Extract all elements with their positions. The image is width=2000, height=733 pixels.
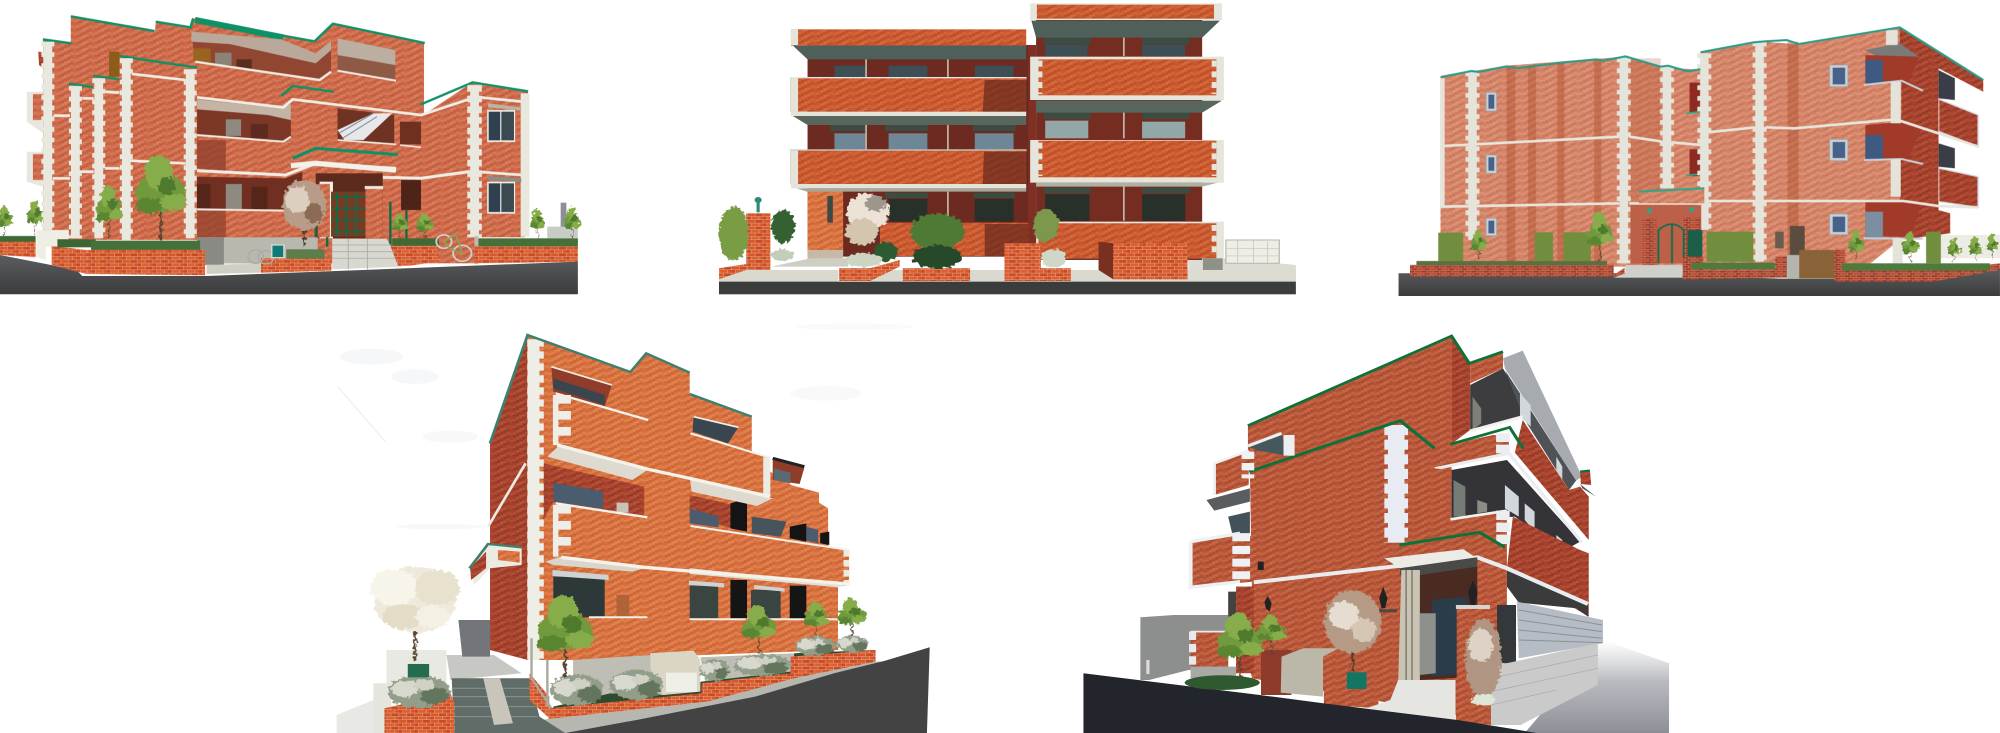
upper-right roof and soffit	[1470, 351, 1596, 540]
shrubs	[387, 635, 869, 708]
planters and pillars	[719, 197, 1188, 281]
small side balcony	[469, 544, 522, 585]
planting beds and hedges	[0, 230, 578, 275]
louvre fence and block wall	[1491, 602, 1603, 725]
mid balcony front	[1434, 433, 1582, 543]
concrete base and steps	[197, 236, 478, 274]
planters	[1410, 250, 2000, 282]
side wall	[490, 338, 528, 660]
left balconies	[1191, 433, 1295, 673]
trees	[1471, 212, 1919, 263]
balcony quoins	[556, 395, 562, 557]
side block	[1191, 632, 1236, 678]
green copings	[1441, 27, 1983, 80]
green copings	[1248, 336, 1590, 547]
quoin column	[1375, 425, 1417, 543]
ground planting band	[553, 650, 874, 710]
lower balconies	[545, 503, 849, 585]
middle recesses	[543, 463, 829, 545]
left wing balconies	[790, 29, 1028, 256]
railing and storage box	[532, 638, 700, 708]
hedge	[1185, 675, 1260, 690]
entrance canopy	[1384, 549, 1477, 682]
name sign	[408, 664, 429, 677]
rear recessed walls	[808, 20, 1202, 263]
side face	[1900, 28, 1983, 240]
corner quoin column	[534, 339, 535, 660]
greenery	[719, 193, 1067, 268]
storage box and planter	[1281, 648, 1367, 697]
copings	[490, 335, 752, 443]
upper side strip	[1452, 336, 1470, 444]
rear fence and side passage	[373, 620, 522, 733]
wall shading bands	[1507, 58, 1661, 266]
pillars	[1261, 605, 1491, 725]
trees	[1217, 590, 1501, 706]
building 2: top centre, frontal facade with balconies	[719, 3, 1296, 294]
recesses	[1686, 43, 1921, 238]
upper balconies	[545, 393, 819, 505]
lamps	[1146, 562, 1478, 674]
string course	[1254, 557, 1588, 604]
building 4: bottom left, corner perspective on a slope	[337, 323, 930, 733]
road and pavement	[719, 258, 1296, 294]
pavement	[447, 662, 889, 733]
trellis hedges	[1438, 232, 1941, 263]
entrance canopy and gate	[1630, 188, 1704, 265]
brick planter walls	[384, 650, 876, 733]
faint background specks	[337, 323, 913, 733]
ground-floor recess	[197, 172, 421, 237]
right wing shading bands	[1788, 42, 1798, 263]
stair opening	[338, 108, 421, 147]
windows	[1486, 65, 1848, 236]
background trees and tower	[0, 201, 580, 238]
building 5: bottom right, corner perspective with dark road	[1083, 336, 1669, 733]
ground windows	[552, 570, 838, 619]
upper main wall	[1248, 336, 1452, 470]
stone quoin pilasters	[48, 42, 525, 240]
string courses	[1441, 119, 1978, 207]
building 3: top right, wide elevation with quoins	[1399, 27, 2000, 296]
lower recess	[1452, 460, 1589, 617]
road	[1083, 673, 1537, 733]
left wing wall	[1441, 57, 1701, 267]
road	[565, 647, 930, 733]
fading block wall	[1525, 640, 1669, 733]
second-floor recess	[197, 99, 291, 171]
front main wall	[1236, 420, 1507, 717]
steps, meter cabinet and waste box	[1614, 226, 1834, 278]
stairs and ramp	[452, 678, 565, 733]
third-floor recess	[109, 32, 396, 81]
bicycles and mailbox	[248, 234, 471, 264]
rear block at right	[1940, 235, 2000, 263]
rear balconies	[27, 52, 43, 187]
entry steps	[771, 258, 848, 267]
building 1: top left, brick complex with green copings	[0, 16, 580, 294]
trees	[370, 567, 866, 677]
right wing balconies	[1030, 3, 1224, 258]
windows with awnings	[830, 26, 1190, 222]
side balconies	[1938, 70, 1978, 207]
white string courses	[53, 74, 522, 178]
gate at right	[1203, 240, 1279, 270]
foundation	[573, 653, 794, 707]
road	[1399, 268, 2000, 296]
trees	[96, 155, 434, 248]
main brick mass	[43, 17, 528, 263]
balcony fronts	[1798, 30, 1923, 263]
entrance and gate	[316, 173, 406, 247]
road	[0, 255, 578, 294]
ground soffit	[1507, 569, 1588, 617]
quoin pilasters	[1443, 42, 1760, 263]
window panes	[1488, 68, 1845, 233]
main front wall	[528, 335, 849, 660]
lower balcony rail and quoin	[1450, 511, 1507, 547]
green copings	[43, 16, 528, 158]
right windows	[487, 103, 521, 214]
window recess upper	[551, 367, 738, 443]
right wing face	[1701, 28, 1900, 265]
balcony soffits and bands	[488, 445, 849, 587]
steps	[1367, 680, 1456, 720]
back wall and perimeter	[1140, 615, 1228, 680]
